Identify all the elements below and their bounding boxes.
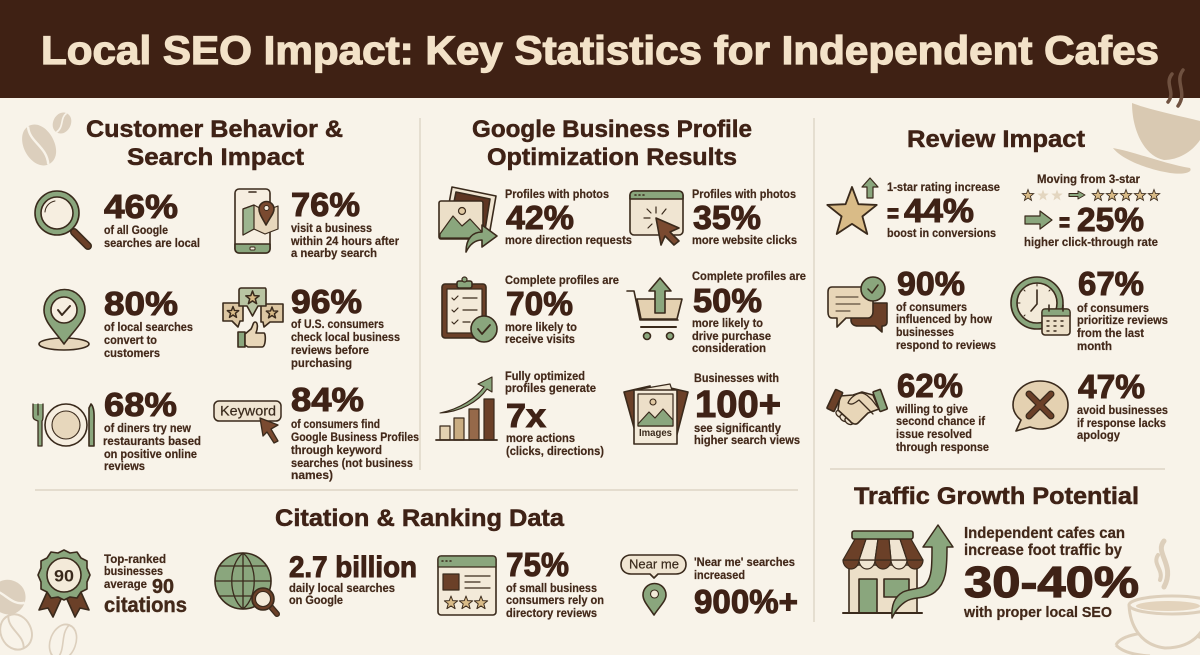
stat: 100 plus bbox=[624, 371, 800, 447]
stat: 100 plus: higher search views bbox=[694, 433, 800, 447]
stat: 46 percent bbox=[35, 188, 200, 250]
stat: 68 percent bbox=[33, 386, 201, 473]
stat: 90 percent: 90% bbox=[897, 265, 965, 302]
icon: review bubbles and thumbs up bbox=[223, 288, 283, 347]
stat: 100 plus: Images bbox=[639, 427, 672, 439]
stat: 90 citations: citations bbox=[104, 594, 187, 617]
stat: 90 citations: businesses bbox=[104, 564, 163, 578]
stat: 30 to 40 percent foot traffic bbox=[963, 525, 1139, 621]
stat: 47 percent: if response lacks bbox=[1077, 416, 1166, 430]
stat: 50 percent bbox=[627, 269, 806, 355]
stat: 68 percent: of diners try new bbox=[104, 421, 192, 435]
stat: 68 percent: restaurants based bbox=[103, 434, 201, 448]
icon: near me bubble and pin bbox=[621, 555, 686, 615]
stat: 75 percent: directory reviews bbox=[506, 606, 597, 620]
stat: 76 percent bbox=[235, 186, 399, 260]
stat: 30 to 40 percent foot traffic: increase foot traffic by bbox=[964, 542, 1122, 559]
stat: 76 percent: within 24 hours after bbox=[290, 234, 399, 248]
panel: review impact bbox=[827, 126, 1168, 454]
stat: 2.7 billion: on Google bbox=[289, 593, 343, 607]
stat: 84 percent: through keyword bbox=[291, 443, 382, 457]
stat: 90 percent: influenced by how bbox=[896, 312, 993, 326]
stat: 44 percent: 1-star rating increase bbox=[887, 180, 1000, 194]
stat: 25 percent: = bbox=[1059, 207, 1070, 237]
stat: 80 percent bbox=[39, 285, 193, 360]
icon: clock and calendar bbox=[1011, 277, 1070, 335]
stat: 7x: more actions bbox=[506, 431, 575, 445]
stat: 62 percent: through response bbox=[896, 440, 989, 454]
stat: 75 percent: consumers rely on bbox=[506, 593, 604, 607]
stat: 44 percent: = bbox=[887, 198, 899, 228]
icon: keyword box and cursor: Keyword bbox=[220, 404, 276, 418]
stat: 47 percent: avoid businesses bbox=[1077, 403, 1168, 417]
panel: google business profile optimization results bbox=[436, 116, 806, 458]
stat: 76 percent: visit a business bbox=[291, 221, 372, 235]
stat: 67 percent: month bbox=[1077, 339, 1112, 353]
icon: handshake bbox=[827, 389, 888, 426]
stat: 30 to 40 percent foot traffic: Independent cafes can bbox=[964, 525, 1125, 542]
stat: 96 percent: 96% bbox=[291, 283, 362, 320]
icon: shopping cart with up arrow bbox=[627, 278, 682, 340]
icon: location pin with check bbox=[39, 290, 89, 350]
stat: 70 percent: more likely to bbox=[505, 320, 577, 334]
stat: 62 percent bbox=[827, 367, 989, 454]
icon: ribbon badge bbox=[38, 550, 90, 617]
stat: 25 percent bbox=[1022, 172, 1160, 249]
stat: 62 percent: issue resolved bbox=[896, 427, 972, 441]
stat: 46 percent: 46% bbox=[104, 188, 178, 225]
stat: 67 percent bbox=[1011, 265, 1168, 353]
stat: 35 percent: 35% bbox=[693, 199, 761, 236]
stat: near me 900 percent bbox=[621, 555, 798, 620]
stat: 96 percent: reviews before bbox=[291, 343, 369, 357]
icon: directory listing bbox=[438, 556, 496, 615]
heading: traffic growth potential: Traffic Growth Potential bbox=[854, 483, 1139, 510]
stat: 46 percent: searches are local bbox=[104, 236, 200, 250]
stat: 84 percent bbox=[214, 381, 419, 482]
stat: 62 percent: second chance if bbox=[896, 414, 986, 428]
icon: star with up arrow bbox=[827, 178, 878, 234]
stat: 90 citations: average bbox=[104, 577, 147, 591]
stat: 100 plus: Businesses with bbox=[694, 371, 779, 385]
icon: keyword box and cursor bbox=[214, 401, 281, 443]
stat: 90 citations: 90 bbox=[54, 566, 74, 586]
stat: 68 percent: on positive online bbox=[104, 447, 197, 461]
heading: google business profile: Optimization Results bbox=[487, 144, 737, 171]
stat: 2.7 billion bbox=[215, 551, 417, 614]
stat: 50 percent: consideration bbox=[692, 341, 766, 355]
stat: 80 percent: 80% bbox=[104, 285, 178, 322]
stat: 25 percent: higher click-through rate bbox=[1024, 235, 1158, 249]
icon: near me bubble and pin: Near me bbox=[629, 558, 679, 572]
icon: plate and cutlery bbox=[33, 404, 94, 446]
stat: 7x: profiles generate bbox=[505, 381, 596, 395]
stat: 96 percent: check local business bbox=[291, 330, 400, 344]
stat: 30 to 40 percent foot traffic: 30-40% bbox=[964, 558, 1139, 607]
stat: 50 percent: Complete profiles are bbox=[692, 269, 806, 283]
stat: 30 to 40 percent foot traffic: with proper local SEO bbox=[963, 604, 1112, 621]
icon: photos with arrow bbox=[439, 187, 497, 252]
stat: 7x: Fully optimized bbox=[505, 369, 585, 383]
stat: 75 percent: 75% bbox=[506, 546, 569, 583]
stat: 84 percent: names) bbox=[291, 468, 333, 482]
stat: 7x bbox=[436, 369, 604, 458]
stat: 67 percent: prioritize reviews bbox=[1077, 313, 1168, 327]
stat: 2.7 billion: 2.7 billion bbox=[289, 551, 417, 584]
stat: 44 percent: boost in conversions bbox=[887, 226, 996, 240]
stat: 25 percent: 25% bbox=[1077, 201, 1144, 238]
heading: google business profile: Google Business Profile bbox=[472, 116, 752, 143]
stat: 90 citations: 90 bbox=[152, 576, 174, 598]
stat: 62 percent: 62% bbox=[897, 367, 963, 404]
icon: image stack bbox=[624, 384, 688, 444]
icon: rising bar chart bbox=[436, 377, 497, 440]
decoration: coffee beans bottom left bbox=[0, 574, 81, 655]
stat: near me 900 percent: increased bbox=[694, 568, 745, 582]
stat: 90 percent: of consumers bbox=[896, 300, 967, 314]
stat: 35 percent: more website clicks bbox=[692, 233, 797, 247]
stat: 75 percent: of small business bbox=[506, 581, 597, 595]
stat: 84 percent: 84% bbox=[291, 381, 364, 418]
icon: clipboard checklist bbox=[442, 277, 497, 342]
stat: 7x: (clicks, directions) bbox=[506, 444, 604, 458]
decoration: coffee cup bottom right bbox=[1116, 541, 1200, 655]
stat: 47 percent: apology bbox=[1077, 428, 1120, 442]
heading: google business profile bbox=[472, 116, 752, 171]
stat: 67 percent: of consumers bbox=[1077, 301, 1149, 315]
decoration: coffee cup top right bbox=[1113, 103, 1200, 174]
stat: 80 percent: convert to bbox=[104, 333, 157, 347]
stat: 25 percent: Moving from 3-star bbox=[1037, 172, 1140, 186]
stat: 76 percent: a nearby search bbox=[291, 246, 377, 260]
stat: 7x: 7x bbox=[506, 397, 547, 434]
stat: 84 percent: Google Business Profiles bbox=[291, 430, 419, 444]
stat: 70 percent: 70% bbox=[506, 285, 573, 322]
stat: 96 percent: of U.S. consumers bbox=[291, 317, 384, 331]
stat: 67 percent: from the last bbox=[1077, 326, 1144, 340]
stat: 62 percent: willing to give bbox=[895, 402, 968, 416]
stat: near me 900 percent: 'Near me' searches bbox=[694, 555, 795, 569]
icon: green arrow bbox=[1025, 211, 1052, 229]
stat: 90 percent bbox=[828, 265, 996, 352]
panel: traffic growth potential bbox=[843, 483, 1139, 621]
stat: 44 percent: 44% bbox=[904, 192, 974, 229]
stat: 50 percent: drive purchase bbox=[692, 329, 771, 343]
stat: 50 percent: more likely to bbox=[692, 316, 763, 330]
stat: 90 percent: respond to reviews bbox=[896, 338, 996, 352]
stat: 96 percent: purchasing bbox=[291, 356, 352, 370]
heading: customer behavior: Search Impact bbox=[127, 144, 304, 171]
icon: phone with map bbox=[235, 189, 278, 253]
stat: 35 percent bbox=[630, 187, 797, 247]
stat: 90 citations bbox=[38, 550, 187, 617]
stat: 84 percent: of consumers find bbox=[291, 417, 380, 431]
stat: 80 percent: customers bbox=[104, 346, 160, 360]
stat: near me 900 percent: 900%+ bbox=[694, 583, 798, 620]
stat: 90 citations: Top-ranked bbox=[104, 552, 166, 566]
stat: 68 percent: reviews bbox=[104, 459, 145, 473]
heading: customer behavior: Customer Behavior & bbox=[86, 116, 343, 143]
icon: magnifying glass bbox=[35, 191, 88, 246]
decoration: steam on header bbox=[1168, 70, 1183, 106]
decoration: coffee beans top left bbox=[15, 109, 75, 171]
icon: browser with cursor bbox=[630, 191, 683, 245]
icon: cafe storefront with growth arrow bbox=[843, 525, 953, 618]
icon: speech bubble with X bbox=[1013, 381, 1068, 431]
stat: 96 percent bbox=[223, 283, 400, 370]
stat: 100 plus: see significantly bbox=[694, 421, 781, 435]
stat: 70 percent bbox=[442, 273, 619, 346]
stat: 42 percent: Profiles with photos bbox=[505, 187, 609, 201]
icon: globe with magnifier bbox=[215, 553, 277, 614]
stat: 47 percent bbox=[1013, 368, 1168, 442]
heading: review impact: Review Impact bbox=[907, 126, 1085, 153]
icon: star comparison row bbox=[1022, 190, 1160, 200]
stat: 100 plus: 100+ bbox=[695, 384, 781, 426]
stat: 84 percent: searches (not business bbox=[291, 456, 413, 470]
stat: 90 percent: businesses bbox=[896, 325, 954, 339]
stat: 50 percent: 50% bbox=[693, 282, 762, 319]
stat: 80 percent: of local searches bbox=[104, 320, 193, 334]
stat: 46 percent: of all Google bbox=[104, 223, 168, 237]
stat: 67 percent: 67% bbox=[1078, 265, 1144, 302]
header band bbox=[0, 0, 1200, 98]
stat: 35 percent: Profiles with photos bbox=[692, 187, 796, 201]
panel: citation and ranking data bbox=[38, 505, 798, 620]
stat: 70 percent: Complete profiles are bbox=[505, 273, 619, 287]
stat: 42 percent: 42% bbox=[506, 199, 574, 236]
stat: 68 percent: 68% bbox=[104, 386, 177, 423]
stat: 75 percent bbox=[438, 546, 604, 620]
panel: customer behavior and search impact bbox=[33, 116, 419, 482]
stat: 44 percent bbox=[827, 178, 1000, 240]
stat: 42 percent: more direction requests bbox=[505, 233, 632, 247]
stat: 2.7 billion: daily local searches bbox=[289, 581, 395, 595]
title: Local SEO Impact: Key Statistics for Independent Cafes bbox=[41, 29, 1159, 73]
heading: customer behavior bbox=[86, 116, 343, 171]
stat: 47 percent: 47% bbox=[1078, 368, 1145, 405]
stat: 70 percent: receive visits bbox=[505, 332, 575, 346]
heading: citation and ranking data: Citation & Ranking Data bbox=[275, 505, 565, 532]
stat: 42 percent bbox=[439, 187, 632, 252]
icon: chat bubbles with check bbox=[828, 277, 887, 332]
stat: 76 percent: 76% bbox=[291, 186, 360, 223]
